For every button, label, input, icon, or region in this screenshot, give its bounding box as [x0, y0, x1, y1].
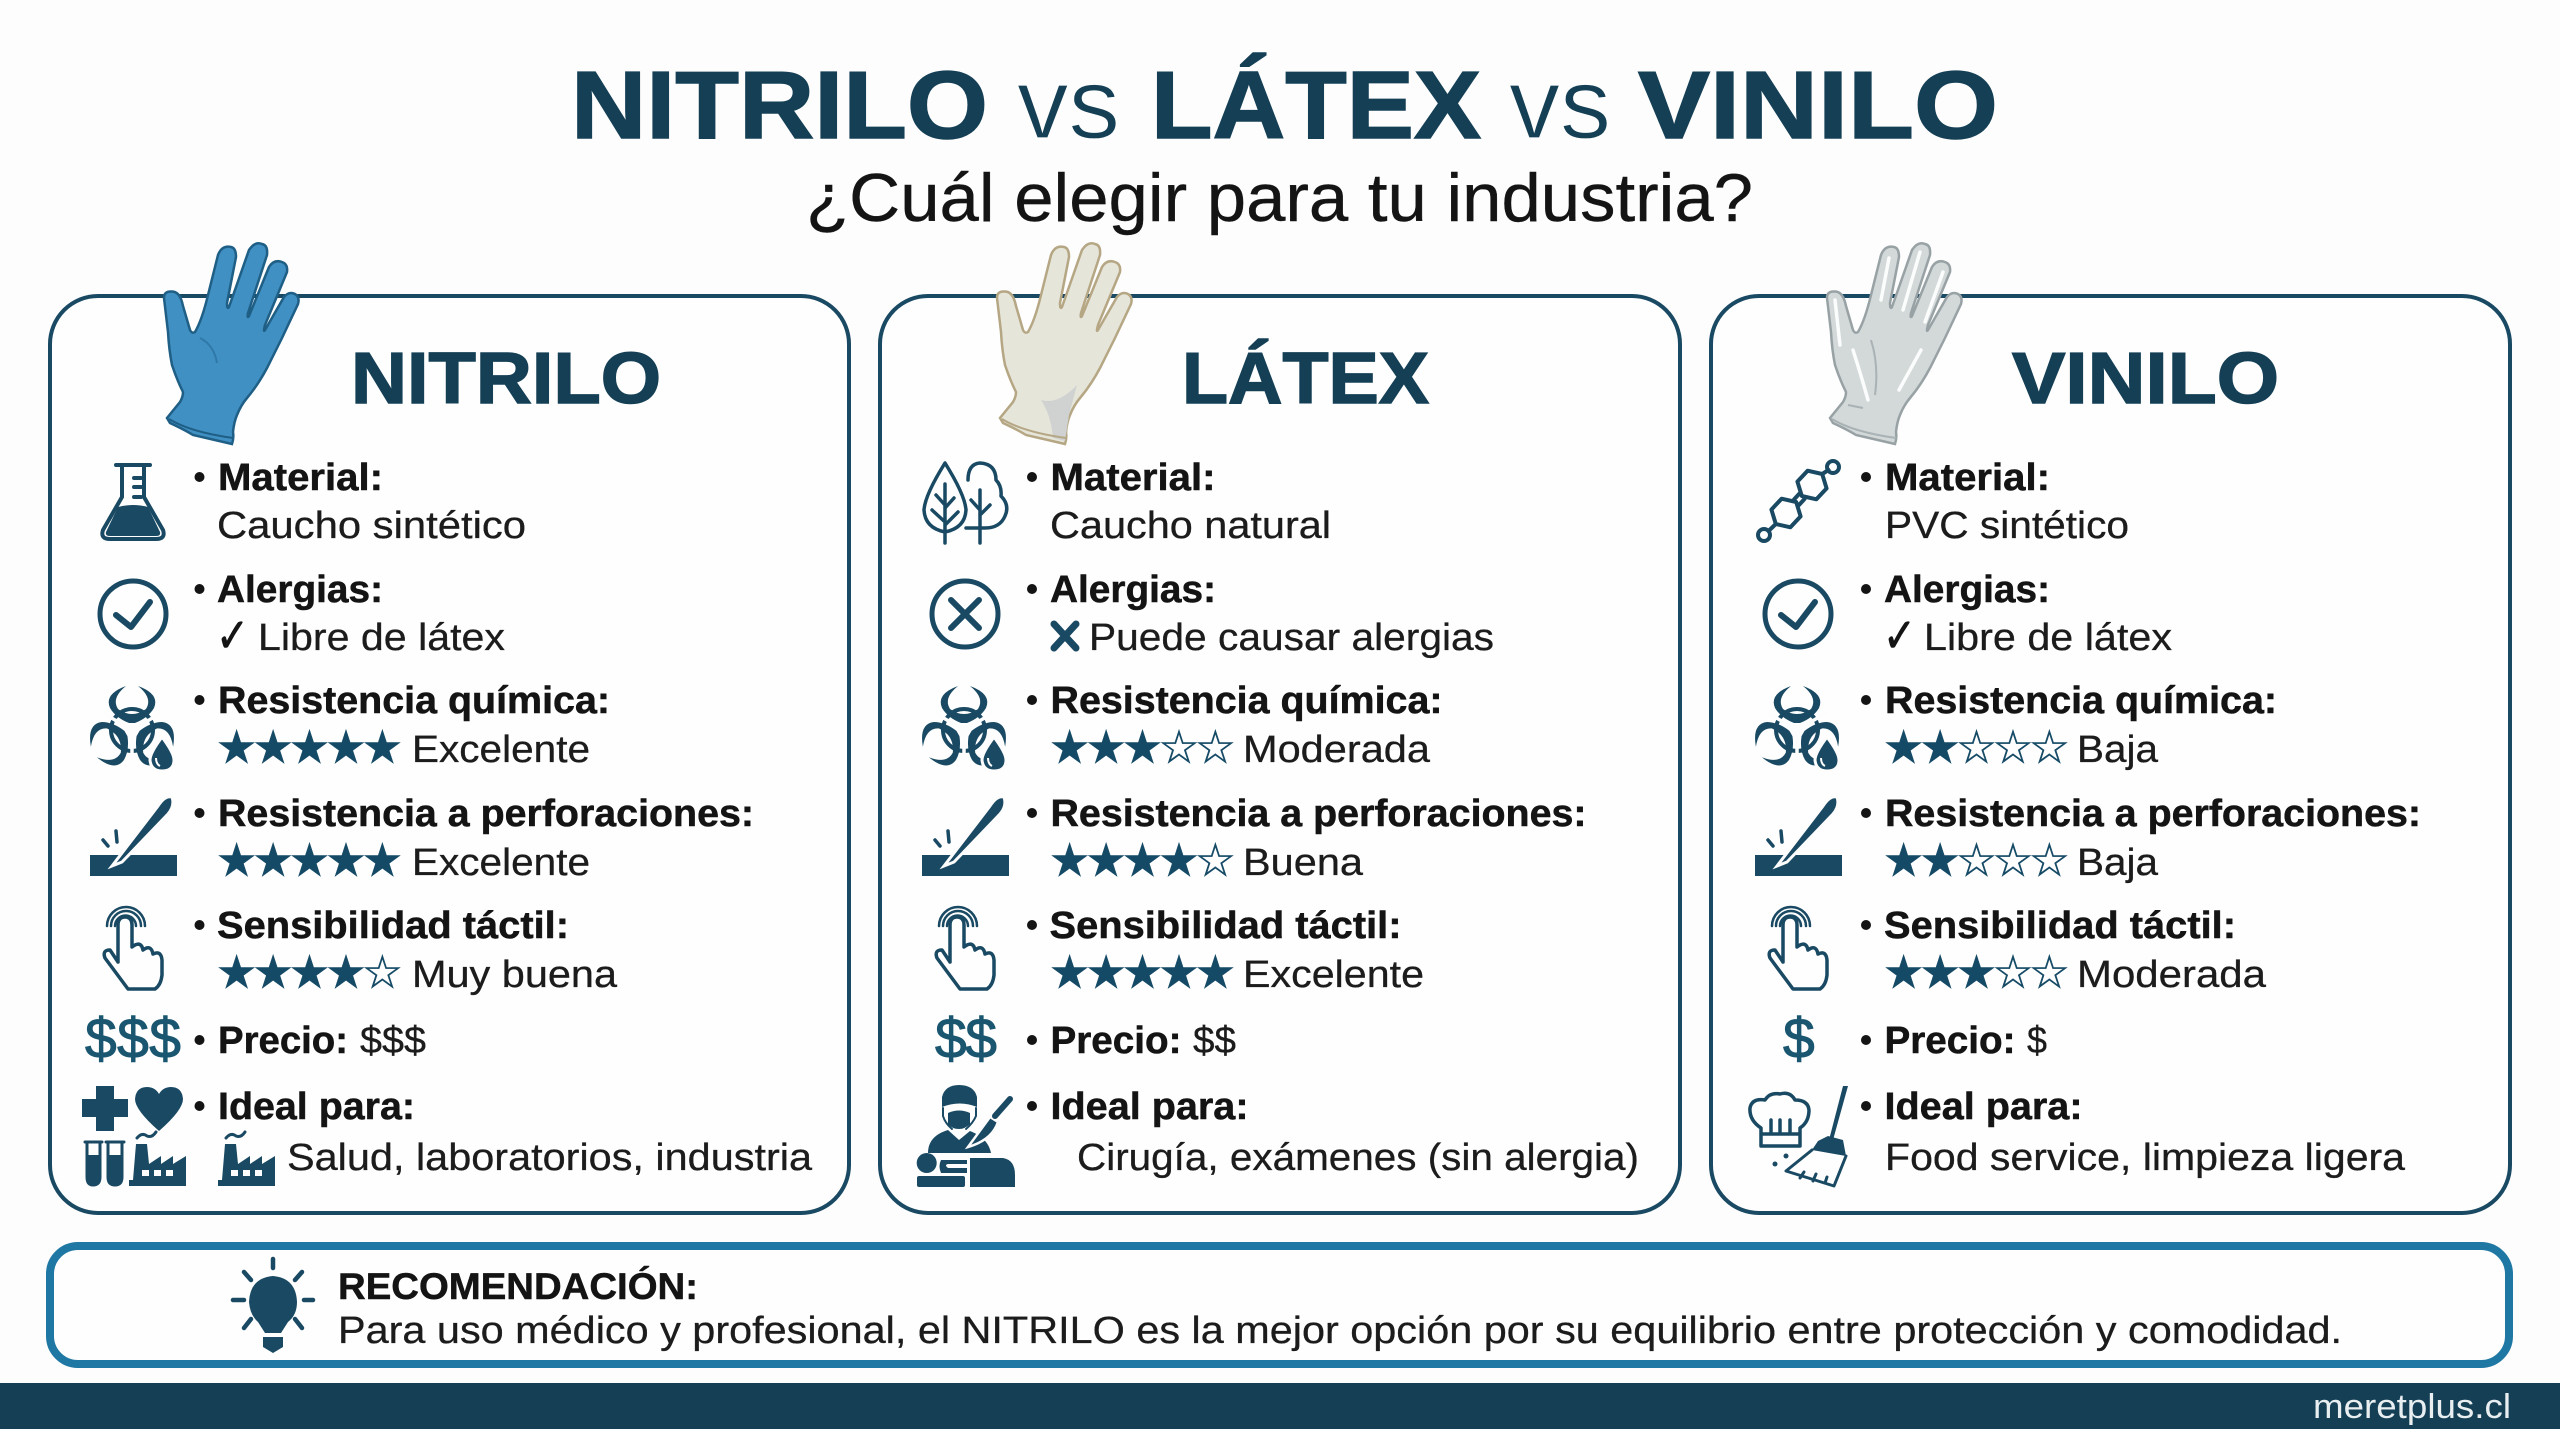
panel: vinilo	[1711, 243, 2510, 1213]
text: recomendacion heading: RECOMENDACIÓN:	[338, 1265, 698, 1307]
text: alergias	[1027, 569, 1494, 659]
text: material	[194, 457, 526, 547]
text: recomendacion body: Para uso médico y profesional, el NITRILO es la mejor opción por su equilibrio entre protección y comodidad.	[338, 1310, 2342, 1352]
row: material	[102, 457, 526, 547]
text: precio: $	[2027, 1020, 2047, 1062]
text: precio: $$$	[360, 1020, 426, 1062]
icon: dollar: $	[1783, 1007, 1815, 1071]
text: alergias: Alergias:	[217, 569, 383, 611]
icon: check circle	[1765, 581, 1831, 647]
text: sensibilidad	[1027, 905, 1424, 999]
icon: needle	[90, 797, 177, 876]
icon: needle	[1755, 797, 1842, 876]
text: alergias: Libre de látex	[1924, 617, 2172, 659]
text: resistencia quimica: Resistencia química:	[1050, 680, 1442, 722]
text: ideal para: Salud, laboratorios, industria	[287, 1137, 813, 1179]
text: resistencia quimica	[1027, 680, 1442, 774]
title: NITRILO	[571, 52, 988, 159]
row: material	[1758, 457, 2129, 547]
text: resistencia quimica: Resistencia química:	[1885, 680, 2277, 722]
icon: dollars: $$$	[85, 1007, 181, 1071]
text: resistencia quimica	[194, 680, 610, 774]
text: ideal para	[1027, 1086, 1639, 1179]
text: material: Material:	[218, 457, 383, 499]
title: vs	[1509, 48, 1611, 160]
text: material: Caucho sintético	[217, 505, 526, 547]
heading: latex: LÁTEX	[1182, 339, 1429, 419]
text: alergias: Alergias:	[1884, 569, 2050, 611]
icon: blue glove	[164, 243, 299, 444]
text: resistencia quimica: ★★☆☆☆	[1883, 720, 2070, 774]
row: ideal para	[1750, 1086, 2406, 1186]
footer: site name: meretplus.cl	[2313, 1388, 2511, 1426]
title: vs	[1017, 48, 1120, 160]
icon: touch hand	[936, 907, 994, 989]
text: sensibilidad: ★★★★★	[1049, 945, 1236, 999]
text: perforaciones: ★★★★★	[216, 833, 403, 887]
text: sensibilidad: Sensibilidad táctil:	[1050, 905, 1402, 947]
text: material: PVC sintético	[1885, 505, 2129, 547]
text: precio	[1861, 1020, 2047, 1062]
text: precio	[1027, 1020, 1236, 1062]
row: alergias	[1765, 569, 2172, 664]
icon: vinyl glove	[1827, 243, 1962, 444]
text: resistencia quimica	[1861, 680, 2277, 774]
text: alergias: Alergias:	[1050, 569, 1216, 611]
text: sensibilidad	[194, 905, 618, 999]
text: ideal para: Ideal para:	[218, 1086, 415, 1128]
row: ideal para	[917, 1085, 1639, 1187]
title: VINILO	[1638, 52, 1998, 159]
icon: molecule	[1758, 461, 1839, 541]
text: ideal para: Ideal para:	[1050, 1086, 1248, 1128]
text: resistencia quimica: ★★★☆☆	[1049, 720, 1236, 774]
text: perforaciones	[1027, 793, 1586, 887]
heading: vinilo: VINILO	[2012, 339, 2279, 419]
text: resistencia quimica: Baja	[2077, 729, 2159, 771]
text: resistencia quimica: Excelente	[412, 729, 590, 771]
row: perforaciones	[922, 793, 1586, 887]
text: precio: Precio:	[218, 1020, 348, 1062]
text: ideal para: Cirugía, exámenes (sin alergia)	[1077, 1137, 1639, 1179]
text: alergias: ✓	[1883, 608, 1916, 664]
icon: latex glove	[997, 243, 1132, 444]
text: precio	[194, 1020, 426, 1062]
text: perforaciones: Excelente	[412, 842, 590, 884]
text: ideal para	[1861, 1086, 2406, 1179]
text: resistencia quimica: ★★★★★	[216, 720, 403, 774]
row: perforaciones	[1755, 793, 2421, 887]
title	[571, 48, 1998, 160]
icon: chef hat and broom	[1750, 1086, 1848, 1186]
text: alergias	[1861, 569, 2172, 664]
icon: check circle	[100, 581, 166, 647]
row: resistencia quimica	[1747, 680, 2277, 774]
text: sensibilidad: Sensibilidad táctil:	[1884, 905, 2236, 947]
text: material: Caucho natural	[1050, 505, 1331, 547]
icon: biohazard	[1747, 686, 1847, 772]
text: precio: $$	[1193, 1020, 1236, 1062]
text: sensibilidad: Muy buena	[412, 954, 618, 996]
text: material	[1027, 457, 1331, 547]
text: alergias	[194, 569, 505, 664]
text: resistencia quimica: Moderada	[1243, 729, 1431, 771]
footer bar	[0, 1383, 2560, 1429]
text: sensibilidad: ★★★★☆	[216, 945, 403, 999]
row: ideal para	[82, 1086, 813, 1186]
text: sensibilidad: ★★★☆☆	[1883, 945, 2070, 999]
text: alergias: ✓	[216, 608, 249, 664]
icon: light bulb	[233, 1259, 313, 1353]
icon: surgeon	[917, 1085, 1015, 1187]
text: alergias: Libre de látex	[258, 617, 505, 659]
text: perforaciones: ★★★★☆	[1049, 833, 1236, 887]
row: resistencia quimica	[82, 680, 610, 774]
text: perforaciones: Resistencia a perforaciones:	[1885, 793, 2421, 835]
panel: latex	[880, 243, 1680, 1213]
title: LÁTEX	[1151, 52, 1481, 159]
icon: flask	[102, 465, 164, 539]
text: perforaciones: Resistencia a perforaciones:	[218, 793, 754, 835]
text: ideal para	[194, 1086, 813, 1186]
text: sensibilidad: Moderada	[2077, 954, 2267, 996]
text: material	[1861, 457, 2129, 547]
icon: touch hand	[1769, 907, 1827, 989]
text: precio: Precio:	[1884, 1020, 2016, 1062]
icon: dollars: $$	[935, 1007, 997, 1071]
text: material: Material:	[1050, 457, 1216, 499]
row: precio	[85, 1007, 426, 1071]
text: perforaciones: Baja	[2077, 842, 2159, 884]
row: alergias	[100, 569, 505, 664]
icon: touch hand	[104, 907, 162, 989]
text: precio: Precio:	[1050, 1020, 1182, 1062]
row: material	[924, 457, 1331, 547]
icon: needle	[922, 797, 1009, 876]
text: sensibilidad: Sensibilidad táctil:	[217, 905, 569, 947]
text: sensibilidad: Excelente	[1243, 954, 1424, 996]
text: perforaciones	[194, 793, 754, 887]
icon: leaf and tree	[924, 463, 1007, 543]
text: ideal para: Ideal para:	[1884, 1086, 2082, 1128]
row: resistencia quimica	[914, 680, 1442, 774]
text: material: Material:	[1885, 457, 2050, 499]
text: resistencia quimica: Resistencia química:	[218, 680, 610, 722]
icon: biohazard	[82, 686, 182, 772]
text: alergias: Puede causar alergias	[1089, 617, 1494, 659]
row: sensibilidad	[1769, 905, 2267, 999]
row: alergias	[932, 569, 1494, 659]
subtitle: ¿Cuál elegir para tu industria?	[806, 160, 1753, 236]
icon: x circle	[932, 581, 998, 647]
row: precio	[1783, 1007, 2047, 1071]
text: perforaciones: Resistencia a perforaciones:	[1050, 793, 1586, 835]
icon: health and industry	[82, 1086, 186, 1186]
row: sensibilidad	[104, 905, 618, 999]
panel: recomendacion	[50, 1246, 2509, 1364]
row: sensibilidad	[936, 905, 1424, 999]
heading: nitrilo: NITRILO	[351, 339, 661, 419]
text: ideal para: Food service, limpieza ligera	[1885, 1137, 2406, 1179]
panel: nitrilo	[50, 243, 849, 1213]
text: sensibilidad	[1861, 905, 2267, 999]
row: precio	[935, 1007, 1236, 1071]
text: perforaciones: Buena	[1243, 842, 1364, 884]
text: perforaciones	[1861, 793, 2421, 887]
icon: biohazard	[914, 686, 1014, 772]
text: perforaciones: ★★☆☆☆	[1883, 833, 2070, 887]
row: perforaciones	[90, 793, 754, 887]
